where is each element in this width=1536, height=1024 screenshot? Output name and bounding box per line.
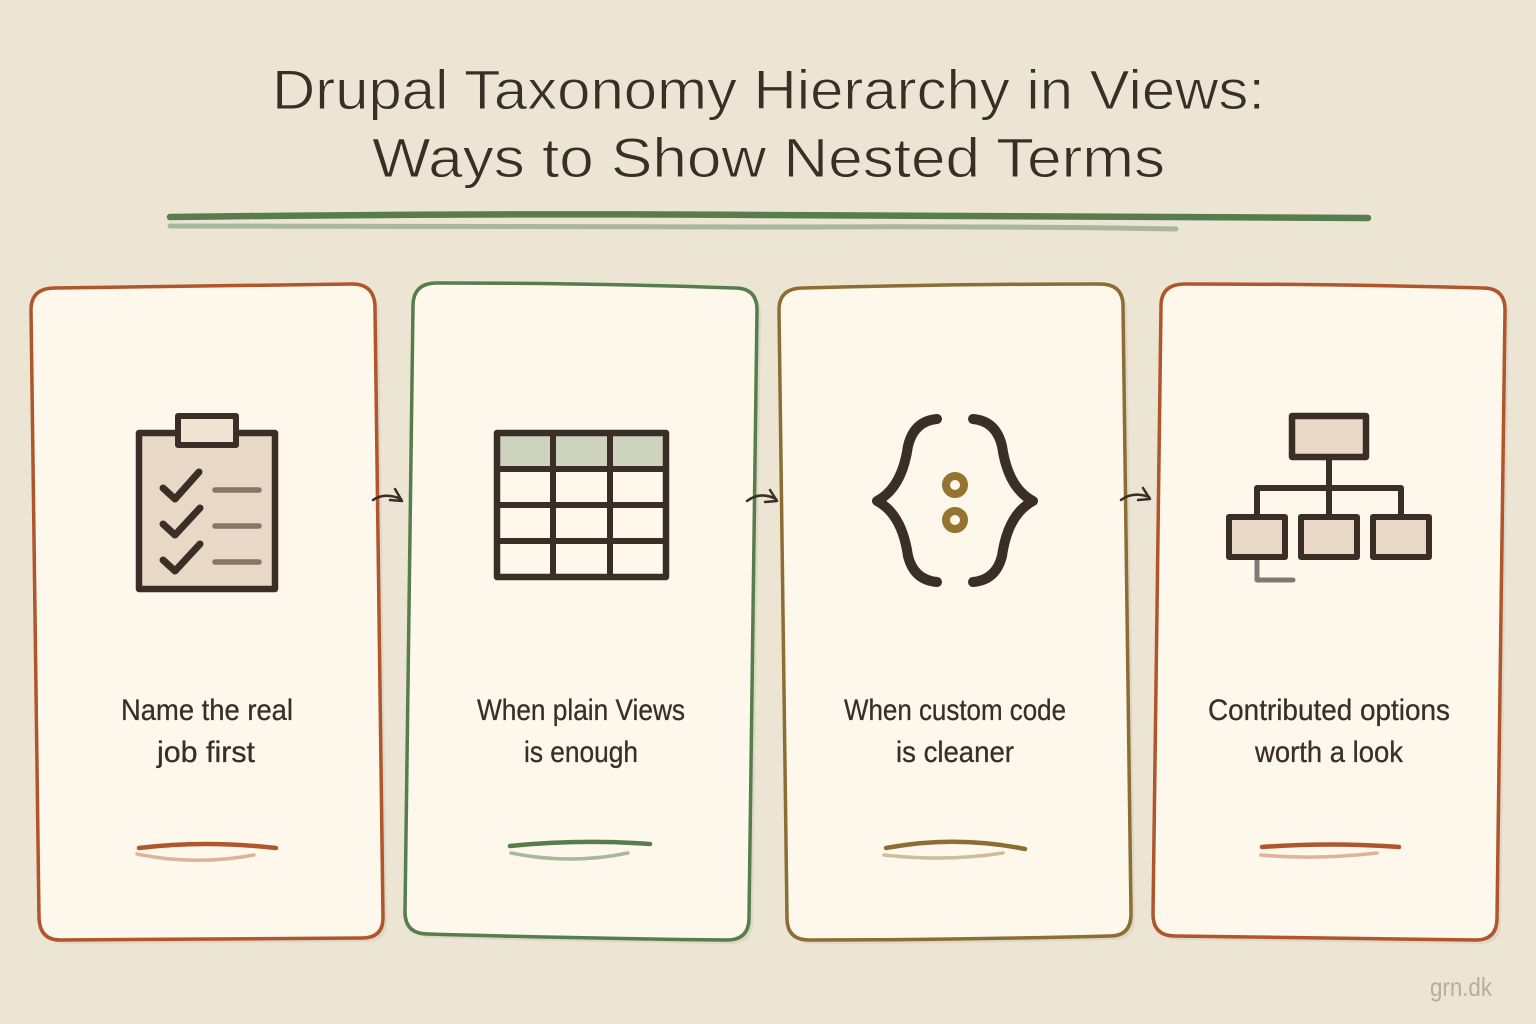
label: when plain views is enough <box>477 694 685 769</box>
arrow 3 <box>1121 488 1150 500</box>
label: when custom code is cleaner: When custom code <box>844 694 1066 727</box>
icon: hierarchy tree <box>1229 416 1429 580</box>
watermark: grn.dk <box>1430 972 1493 1002</box>
label: contributed options worth a look <box>1208 694 1450 769</box>
panel: contributed options worth a look <box>1153 284 1509 944</box>
accent strokes <box>137 844 276 860</box>
accent strokes <box>884 842 1025 858</box>
label: when custom code is cleaner <box>844 694 1066 769</box>
title underline <box>170 214 1368 229</box>
title: Ways to Show Nested Terms <box>372 126 1165 189</box>
arrow 2 <box>747 490 777 502</box>
label: name the real job first <box>121 694 293 769</box>
icon: clipboard checklist <box>139 416 275 589</box>
label: when plain views is enough: When plain Views <box>477 694 685 727</box>
label: when plain views is enough: is enough <box>524 736 638 769</box>
accent strokes <box>510 842 650 859</box>
icon: curly braces with colon <box>877 419 1033 582</box>
icon: table <box>497 433 666 577</box>
label: name the real job first: Name the real <box>121 694 293 727</box>
title: Drupal Taxonomy Hierarchy in Views: <box>272 58 1265 121</box>
accent strokes <box>1261 844 1399 857</box>
label: contributed options worth a look: worth a look <box>1254 736 1404 769</box>
label: contributed options worth a look: Contributed options <box>1208 694 1450 727</box>
panel: when plain views is enough <box>405 283 761 944</box>
title <box>272 58 1265 189</box>
label: name the real job first: job first <box>156 736 256 769</box>
label: when custom code is cleaner: is cleaner <box>896 736 1014 769</box>
panel: name the real job first <box>31 284 387 944</box>
panel: when custom code is cleaner <box>779 284 1135 944</box>
arrow 1 <box>373 489 402 501</box>
